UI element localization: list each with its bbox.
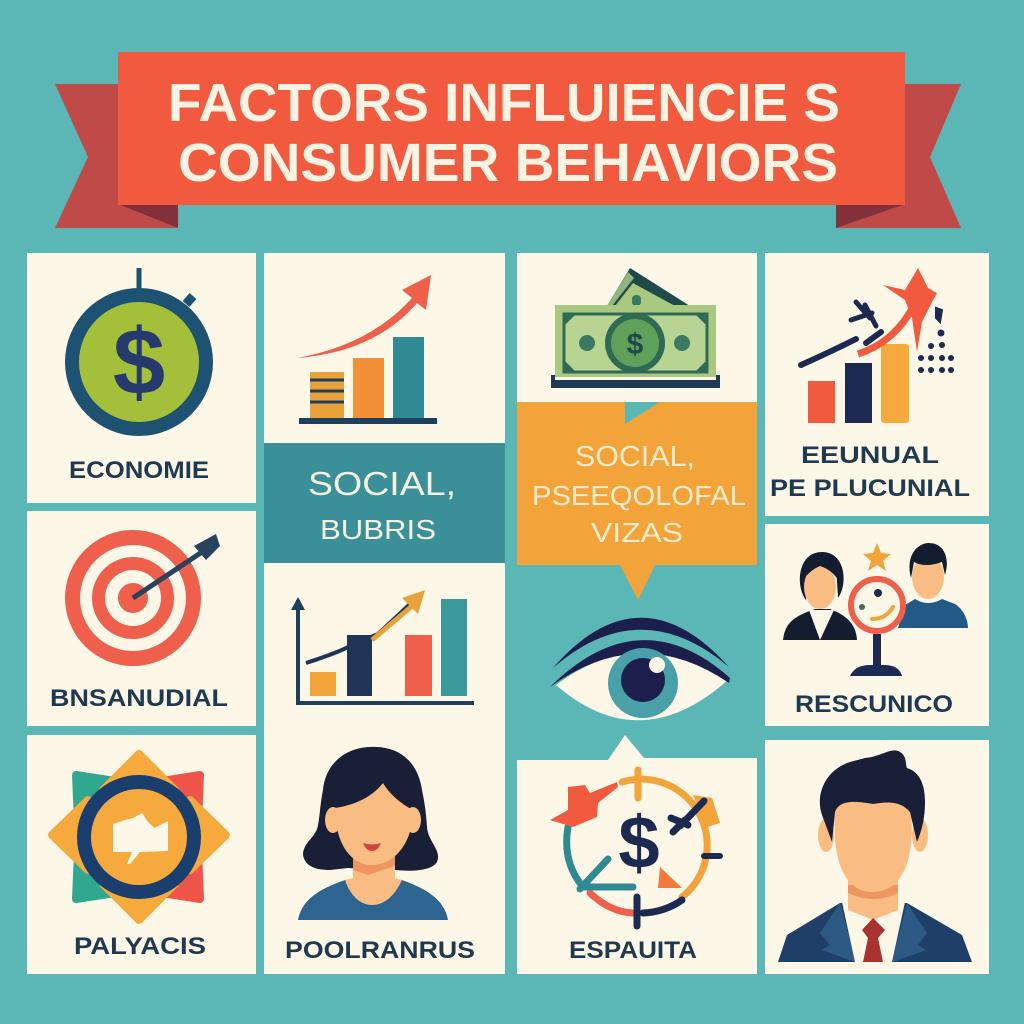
title text: CONSUMER BEHAVIORS xyxy=(178,133,838,193)
icon: banknote: $ xyxy=(627,328,644,361)
icon: two people with dial xyxy=(783,543,968,676)
panel: economie xyxy=(27,253,256,503)
label: rescunico: RESCUNICO xyxy=(795,691,953,718)
icon: woman xyxy=(298,747,448,920)
icon: flower badge xyxy=(52,754,226,920)
text: eeunial pe plucunial: EEUNUAL xyxy=(801,442,939,469)
icon: dollar coin: $ xyxy=(113,309,165,414)
text: social bubris: BUBRIS xyxy=(320,514,436,545)
panel: palyacis xyxy=(27,735,256,974)
icon: dollar cycle: $ xyxy=(618,801,660,884)
text: social pseqolorial vizas: VIZAS xyxy=(591,517,683,548)
title text: FACTORS INFLUIENCIE S xyxy=(168,73,840,133)
label: bnsanudial: BNSANUDIAL xyxy=(50,685,228,712)
icon: businessman xyxy=(778,750,972,962)
label: palyacis: PALYACIS xyxy=(74,933,206,960)
panel: eeunial xyxy=(765,253,989,516)
title text xyxy=(168,73,840,193)
panel: rescunico xyxy=(765,524,989,726)
panel: social bubris xyxy=(264,443,505,563)
icon: dollar coin xyxy=(65,268,213,436)
panel: espauita xyxy=(517,735,757,974)
text: social pseqolorial vizas xyxy=(532,441,746,548)
icon: target with arrow xyxy=(65,530,220,666)
icon: line chart with bars xyxy=(291,590,474,703)
icon: bars with rising arrow xyxy=(297,275,437,424)
label: poolranrus: POOLRANRUS xyxy=(285,937,475,964)
icon: dollar cycle xyxy=(550,770,720,926)
text: eeunial pe plucunial: PE PLUCUNIAL xyxy=(770,475,970,502)
panel: social speech bubble xyxy=(517,402,757,600)
panel: poolranrus xyxy=(264,563,505,974)
panel: banknote xyxy=(517,253,757,402)
label: economie: ECONOMIE xyxy=(69,457,209,484)
text: social bubris xyxy=(308,465,456,545)
panel: growth chart xyxy=(264,253,505,443)
text: eeunial pe plucunial xyxy=(770,442,970,502)
panel: target xyxy=(27,511,256,726)
icon: bars with arrow and plane xyxy=(801,268,954,423)
icon: banknote xyxy=(551,268,720,388)
label: espauita: ESPAUITA xyxy=(569,937,697,964)
icon: eye xyxy=(550,618,730,720)
text: social pseqolorial vizas: SOCIAL, xyxy=(575,441,695,473)
text: social pseqolorial vizas: PSEEQOLOFAL xyxy=(532,480,746,511)
panel: businessman xyxy=(765,740,989,974)
text: social bubris: SOCIAL, xyxy=(308,465,456,502)
title banner xyxy=(55,52,961,228)
